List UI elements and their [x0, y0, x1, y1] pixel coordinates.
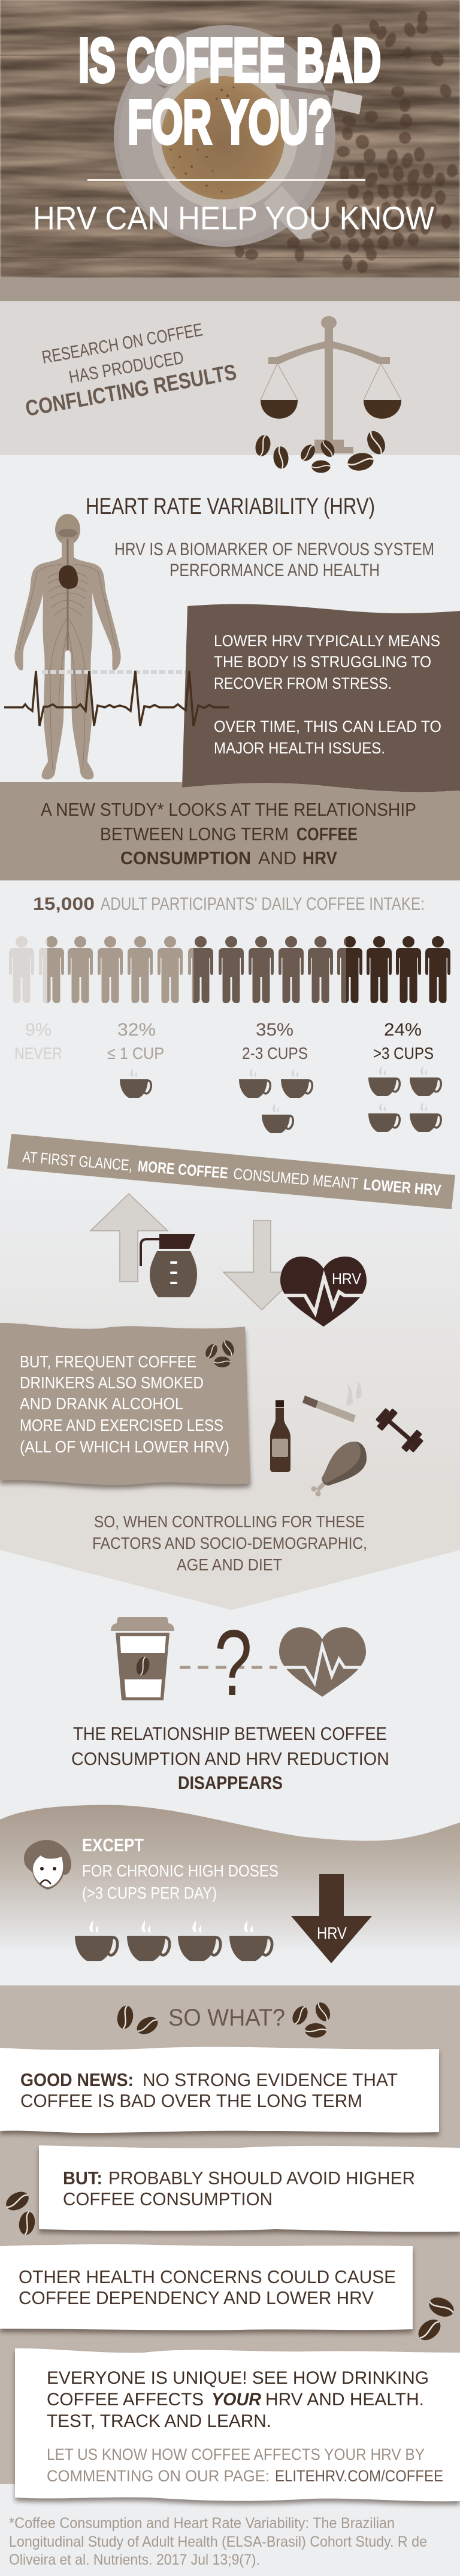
callout: lower HRV: THE BODY IS STRUGGLING TO: [214, 653, 431, 671]
stat: more than three cups: [373, 1020, 434, 1063]
footnote: *Coffee Consumption and Heart Rate Variability: The Brazilian: [9, 2515, 395, 2532]
panel: new study: AND: [258, 847, 296, 868]
panel: new study: BETWEEN LONG TERM: [100, 824, 289, 844]
callout: lower HRV: RECOVER FROM STRESS.: [214, 674, 392, 692]
tan divider band: [0, 278, 460, 301]
card: everyone is unique: ELITEHRV.COM/COFFEE: [275, 2467, 443, 2485]
chart: people pictogram: [9, 936, 450, 1003]
heading: SO WHAT?: [168, 2005, 285, 2031]
panel: confounding factors: (ALL OF WHICH LOWER HRV): [20, 1437, 229, 1456]
card: everyone is unique: TEST, TRACK AND LEARN.: [47, 2411, 271, 2431]
stat: never: NEVER: [14, 1044, 62, 1063]
banner: at first glance: AT FIRST GLANCE,: [22, 1148, 133, 1175]
callout: lower HRV: LOWER HRV TYPICALLY MEANS: [214, 632, 440, 650]
card: but: COFFEE CONSUMPTION: [63, 2188, 273, 2209]
panel: controlling for factors: AGE AND DIET: [177, 1555, 282, 1574]
text: except: (>3 CUPS PER DAY): [82, 1884, 217, 1902]
card: good news: [0, 2047, 439, 2133]
panel: participants: [9, 894, 450, 1133]
icon: HRV heart: HRV: [332, 1270, 362, 1288]
text: relationship disappears: THE RELATIONSHIP BETWEEN COFFEE: [73, 1723, 387, 1744]
text: except: FOR CHRONIC HIGH DOSES: [82, 1861, 279, 1880]
panel: confounding factors: AND DRANK ALCOHOL: [20, 1394, 183, 1413]
icon: coffee beans under scale: [253, 428, 389, 473]
stat: two to three cups: 2-3 CUPS: [242, 1044, 308, 1063]
panel: new study: [0, 782, 460, 880]
arrow: up: [90, 1194, 168, 1282]
tilted research text: RESEARCH ON COFFEE: [40, 320, 204, 368]
card: other concerns: [0, 2244, 413, 2330]
subtitle: HRV CAN HELP YOU KNOW: [33, 199, 434, 237]
callout: lower HRV: MAJOR HEALTH ISSUES.: [214, 739, 385, 757]
icon: beans beside card three: [414, 2294, 457, 2344]
chart: ECG line: [4, 671, 229, 726]
banner: at first glance: CONSUMED MEANT: [232, 1164, 359, 1192]
panel: controlling for factors: SO, WHEN CONTROLLING FOR THESE: [94, 1512, 365, 1531]
spoon: [156, 84, 335, 96]
description: PERFORMANCE AND HEALTH: [170, 561, 380, 580]
banner: at first glance: MORE COFFEE: [137, 1157, 229, 1182]
icon: drumstick: [311, 1442, 367, 1496]
arrow: HRV down: [291, 1874, 372, 1963]
arrow: HRV down: HRV: [317, 1924, 347, 1942]
icon: four cups: [75, 1920, 274, 1961]
card: good news: NO STRONG EVIDENCE THAT: [143, 2069, 398, 2090]
title line two: FOR YOU?: [128, 87, 332, 156]
card: everyone is unique: COMMENTING ON OUR PAGE:: [47, 2467, 270, 2485]
coffee cup on saucer: [114, 25, 362, 247]
stat: never: [14, 1020, 62, 1063]
plank seams: [0, 55, 460, 258]
card: good news: COFFEE IS BAD OVER THE LONG TERM: [20, 2090, 362, 2111]
banner: at first glance: LOWER HRV: [363, 1175, 442, 1199]
nerves: [19, 565, 116, 770]
icon: sad face: [24, 1840, 71, 1890]
panel: new study: COFFEE: [296, 824, 358, 844]
panel: conflicting results: [0, 301, 460, 473]
banner: at first glance: [7, 1134, 455, 1209]
arrow: down: [223, 1221, 301, 1310]
stat: two to three cups: [242, 1020, 308, 1063]
card: other concerns: OTHER HEALTH CONCERNS COULD CAUSE: [19, 2266, 396, 2287]
card: everyone is unique: COFFEE AFFECTS: [47, 2390, 204, 2409]
icon: dumbbell: [373, 1404, 426, 1456]
ECG dashed top line: [42, 670, 187, 674]
stat: more than three cups: >3 CUPS: [373, 1044, 434, 1063]
panel: confounding factors: [0, 1323, 250, 1485]
icon: heart with pulse: [279, 1627, 367, 1697]
footnote: Longitudinal Study of Adult Health (ELSA-Brasil) Cohort Study. R de: [9, 2533, 427, 2550]
callout: lower HRV: OVER TIME, THIS CAN LEAD TO: [214, 718, 441, 735]
panel: confounding factors: DRINKERS ALSO SMOKED: [20, 1373, 204, 1392]
icon: human body with nervous system: [14, 514, 121, 780]
panel: heart rate variability: [4, 494, 460, 792]
stat: never: 9%: [25, 1020, 52, 1040]
dashed connector: [180, 1666, 277, 1669]
panel: new study: CONSUMPTION: [120, 847, 251, 868]
wood background: [0, 0, 460, 278]
panel: coffee up, HRV down: [90, 1194, 367, 1327]
card: but: BUT:: [63, 2168, 102, 2188]
card: but: [39, 2145, 460, 2232]
description: [114, 540, 434, 580]
heading: 15,000: [33, 894, 95, 914]
text: relationship disappears: DISAPPEARS: [178, 1772, 283, 1793]
card: but: PROBABLY SHOULD AVOID HIGHER: [108, 2168, 415, 2188]
card: good news: GOOD NEWS:: [20, 2069, 134, 2090]
title divider: [87, 179, 365, 181]
stat: up to one cup: 32%: [117, 1020, 156, 1040]
icon: cigarette: [302, 1381, 362, 1422]
tilted research text: HAS PRODUCED: [67, 348, 185, 388]
panel: controlling for factors: FACTORS AND SOCIO-DEMOGRAPHIC,: [92, 1534, 367, 1552]
icon: small beans: [203, 1339, 237, 1367]
icon: coffee carafe: [141, 1234, 197, 1297]
footnote: [9, 2515, 427, 2568]
text: except: EXCEPT: [82, 1835, 144, 1855]
panel: except: [0, 1805, 460, 1986]
card: everyone is unique: HRV AND HEALTH.: [265, 2390, 424, 2409]
panel: confounding factors: BUT, FREQUENT COFFEE: [20, 1352, 196, 1371]
panel: new study: HRV: [302, 847, 337, 868]
icon: bottle: [270, 1400, 290, 1472]
icon: cups: [120, 1066, 442, 1133]
tilted research text: CONFLICTING RESULTS: [23, 360, 238, 421]
footnote: Oliveira et al. Nutrients. 2017 Jul 13;9(7).: [9, 2551, 260, 2568]
hero panel: [0, 0, 460, 278]
icon: HRV heart: [280, 1257, 367, 1327]
icon: takeaway coffee cup: [111, 1617, 174, 1700]
icon: beans: [116, 2000, 333, 2038]
card: everyone is unique: LET US KNOW HOW COFFEE AFFECTS YOUR HRV BY: [47, 2445, 425, 2463]
stat: more than three cups: 24%: [384, 1020, 422, 1040]
card: other concerns: COFFEE DEPENDENCY AND LOWER HRV: [19, 2287, 374, 2308]
icon: beans beside card two: [3, 2188, 37, 2236]
tilted research text: [23, 320, 238, 421]
panel: controlling for factors: [0, 1512, 460, 1610]
callout: lower HRV: [182, 604, 460, 792]
scattered coffee beans: [235, 10, 458, 273]
text: relationship disappears: [71, 1723, 389, 1793]
panel: so what: [0, 1985, 460, 2484]
panel: confounding factors: MORE AND EXERCISED LESS: [20, 1416, 223, 1434]
icon: balance scale: [261, 316, 401, 453]
card: everyone is unique: YOUR: [211, 2390, 261, 2409]
stat: two to three cups: 35%: [256, 1020, 293, 1040]
text: except: [82, 1835, 279, 1902]
question mark: ?: [214, 1611, 252, 1715]
heading: HEART RATE VARIABILITY (HRV): [86, 494, 375, 519]
text: relationship disappears: CONSUMPTION AND HRV REDUCTION: [71, 1748, 389, 1769]
stat: up to one cup: ≤ 1 CUP: [107, 1044, 164, 1063]
stat: up to one cup: [107, 1020, 164, 1063]
card: everyone is unique: [15, 2348, 460, 2501]
mid background gradient: [0, 1168, 460, 1550]
panel: new study: A NEW STUDY* LOOKS AT THE RELATIONSHIP: [41, 799, 416, 820]
card: everyone is unique: EVERYONE IS UNIQUE! SEE HOW DRINKING: [47, 2368, 429, 2388]
